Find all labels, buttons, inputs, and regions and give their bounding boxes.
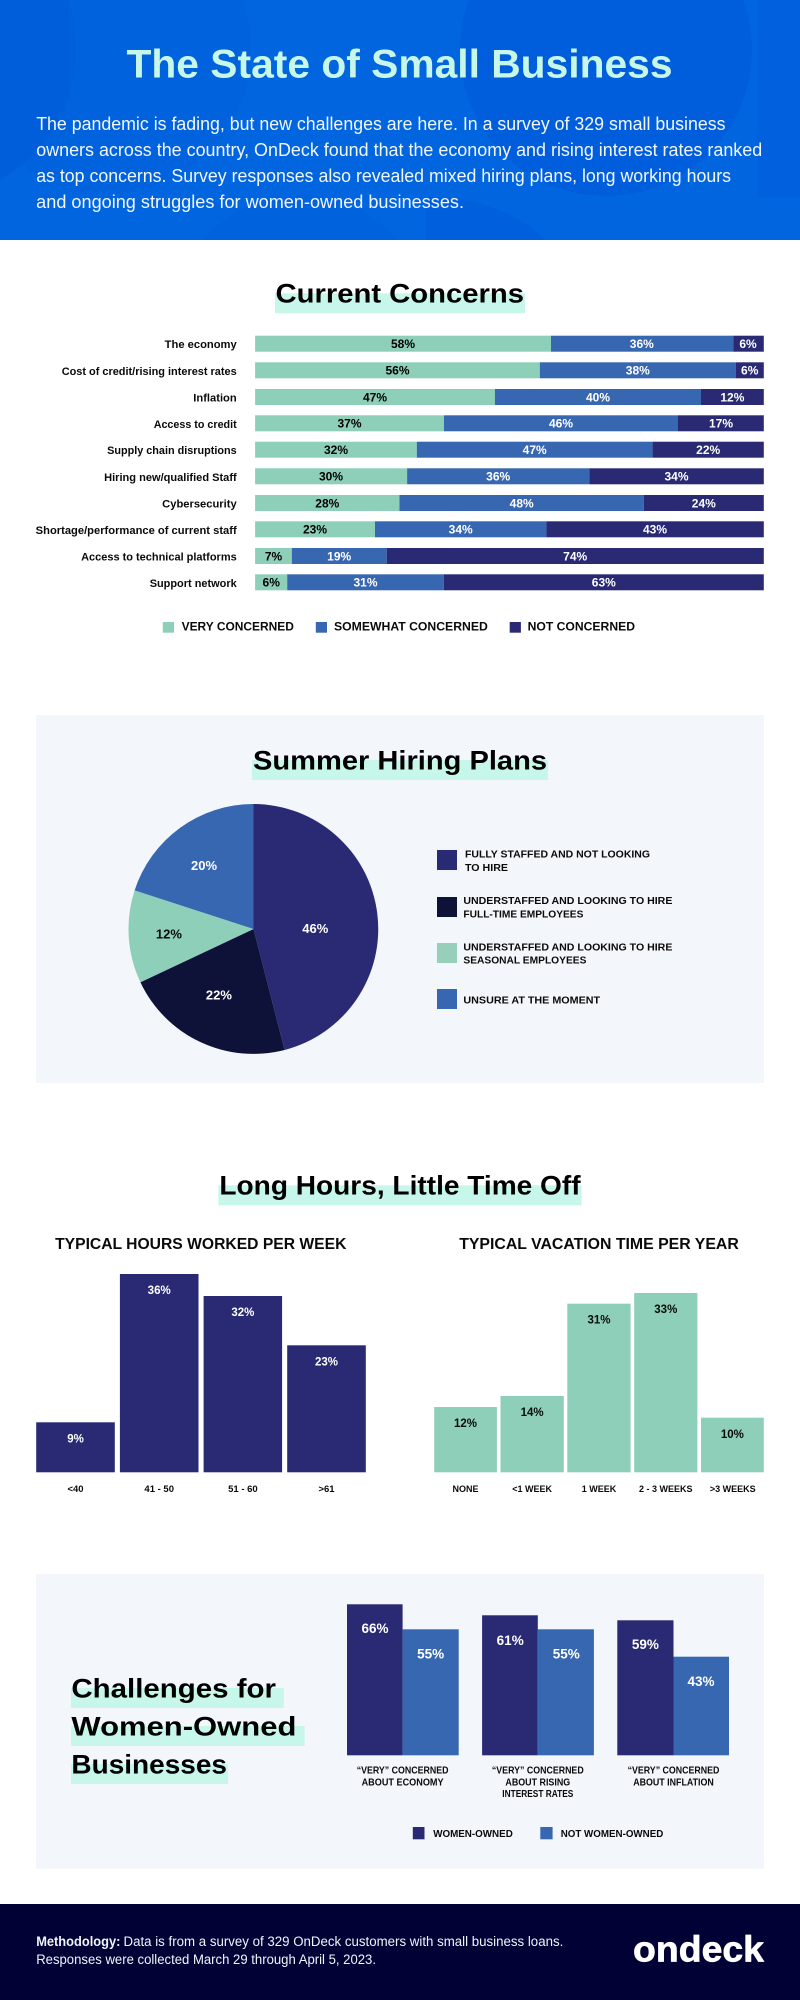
bar values: 32%: [231, 1307, 254, 1319]
pie legend: UNSURE AT THE MOMENT: [463, 994, 601, 1006]
bar captions: INTEREST RATES: [502, 1789, 574, 1800]
somewhat and not concerned values: [327, 337, 759, 590]
grouped bar chart: [347, 1604, 729, 1755]
row labels: Access to credit: [154, 419, 237, 431]
somewhat and not concerned values: 74%: [563, 549, 588, 563]
bars: [36, 1274, 366, 1472]
methodology text: Data is from a survey of 329 OnDeck customers with small business loans.: [124, 1934, 563, 1949]
axis labels: 1 WEEK: [582, 1484, 617, 1494]
somewhat and not concerned values: 46%: [549, 417, 573, 431]
axis labels: <40: [67, 1484, 84, 1495]
bar values: 14%: [521, 1407, 544, 1419]
bar captions: ABOUT RISING: [505, 1777, 570, 1788]
somewhat and not concerned values: 47%: [523, 443, 547, 457]
pie chart: 20%: [191, 858, 217, 873]
somewhat and not concerned values: 12%: [720, 390, 745, 404]
heading: Long Hours, Little Time Off: Long Hours, Little Time Off: [219, 1170, 582, 1200]
somewhat and not concerned values: 6%: [739, 337, 757, 351]
panel: hero header: [0, 0, 800, 240]
row labels: Cybersecurity: [162, 498, 238, 510]
intro text block: as top concerns. Survey responses also revealed mixed hiring plans, long working hours: [36, 166, 731, 186]
panel: summer hiring plans: [36, 715, 764, 1083]
bar captions: ABOUT INFLATION: [633, 1777, 714, 1788]
methodology text: [36, 1934, 563, 1967]
somewhat and not concerned values: 22%: [696, 443, 721, 457]
bar values: [454, 1304, 744, 1441]
heading: Challenges for Women-Owned Businesses: Challenges for: [71, 1674, 277, 1704]
very concerned values: 23%: [303, 523, 327, 537]
intro text block: The pandemic is fading, but new challenges are here. In a survey of 329 small business: [36, 114, 725, 134]
somewhat and not concerned values: 38%: [626, 364, 650, 378]
bar values: 9%: [67, 1434, 84, 1446]
chart title: TYPICAL VACATION TIME PER YEAR: [459, 1236, 739, 1253]
intro text block: and ongoing struggles for women-owned businesses.: [36, 192, 464, 212]
bar values: 33%: [654, 1304, 677, 1316]
grouped bar chart: 55%: [553, 1647, 580, 1662]
very concerned values: [263, 337, 415, 590]
somewhat and not concerned values: 36%: [630, 337, 654, 351]
bar captions: “VERY” CONCERNED: [628, 1766, 719, 1777]
heading: Current Concerns: Current Concerns: [276, 279, 524, 309]
heading: Challenges for Women-Owned Businesses: [71, 1674, 305, 1784]
heading: Summer Hiring Plans: Summer Hiring Plans: [253, 745, 547, 775]
panel: footer: [0, 1904, 800, 2000]
heading: Challenges for Women-Owned Businesses: Businesses: [71, 1750, 227, 1780]
chart: typical hours worked per week: [36, 1236, 366, 1495]
bar captions: “VERY” CONCERNED: [492, 1766, 584, 1777]
grouped bar chart: 43%: [687, 1674, 715, 1689]
somewhat and not concerned values: 19%: [327, 549, 352, 563]
pie legend: [437, 848, 672, 1009]
somewhat and not concerned values: 31%: [353, 576, 378, 590]
chart title: TYPICAL HOURS WORKED PER WEEK: [55, 1236, 347, 1253]
bar values: [67, 1285, 338, 1446]
row labels: [36, 339, 238, 590]
bar values: 31%: [587, 1315, 611, 1327]
very concerned values: 28%: [315, 496, 340, 510]
pie legend: FULL-TIME EMPLOYEES: [463, 908, 583, 920]
bar captions: “VERY” CONCERNED: [357, 1766, 448, 1777]
somewhat and not concerned values: 24%: [692, 496, 716, 510]
chart: typical vacation time per year: [434, 1236, 764, 1494]
somewhat and not concerned values: 40%: [586, 390, 610, 404]
very concerned values: 7%: [265, 549, 283, 563]
bar legend: WOMEN-OWNED: [433, 1829, 513, 1840]
somewhat concerned segments: [287, 336, 736, 590]
very concerned values: 37%: [337, 417, 362, 431]
pie legend: SEASONAL EMPLOYEES: [463, 955, 586, 967]
axis labels: 41 - 50: [144, 1484, 174, 1495]
logo: ondeck: ondeck: [633, 1929, 765, 1970]
methodology text: Responses were collected March 29 through April 5, 2023.: [36, 1952, 376, 1967]
bar values: 23%: [315, 1356, 338, 1368]
methodology text: Methodology:: [36, 1934, 120, 1949]
very concerned values: 6%: [263, 576, 280, 590]
somewhat and not concerned values: 63%: [592, 576, 616, 590]
pie chart: 22%: [206, 988, 232, 1002]
bar captions: [357, 1766, 719, 1800]
bar values: 12%: [454, 1418, 477, 1430]
row labels: The economy: [165, 339, 238, 351]
pie chart: [129, 804, 378, 1054]
grouped bar chart: 61%: [497, 1633, 524, 1648]
intro text block: owners across the country, OnDeck found that the economy and rising interest rates ranked: [36, 140, 762, 160]
very concerned values: 47%: [363, 390, 387, 404]
title: The State of Small Business: [126, 43, 672, 87]
grouped bar chart: 66%: [361, 1621, 389, 1636]
bar legend: NOT WOMEN-OWNED: [561, 1829, 663, 1840]
not concerned segments: [387, 336, 764, 590]
very concerned values: 32%: [324, 443, 348, 457]
intro text block: [36, 114, 762, 212]
legend: current concerns: [163, 620, 635, 634]
somewhat and not concerned values: 34%: [449, 523, 473, 537]
row labels: Inflation: [193, 392, 237, 404]
legend: current concerns: SOMEWHAT CONCERNED: [334, 620, 488, 634]
pie legend: UNDERSTAFFED AND LOOKING TO HIRE: [463, 941, 672, 953]
bar values: 10%: [721, 1429, 744, 1441]
somewhat and not concerned values: 6%: [741, 364, 759, 378]
row labels: Support network: [150, 578, 238, 590]
pie chart: 46%: [302, 921, 329, 936]
heading: Challenges for Women-Owned Businesses: Women-Owned: [71, 1712, 296, 1742]
axis labels: <1 WEEK: [512, 1484, 552, 1494]
bar legend: [413, 1827, 663, 1840]
grouped bar chart: 59%: [632, 1637, 659, 1652]
row labels: Access to technical platforms: [81, 551, 237, 563]
row labels: Supply chain disruptions: [107, 445, 237, 457]
row labels: Shortage/performance of current staff: [36, 525, 237, 537]
axis labels: 2 - 3 WEEKS: [639, 1484, 693, 1494]
grouped bar chart: 55%: [417, 1647, 444, 1662]
very concerned values: 30%: [319, 470, 343, 484]
somewhat and not concerned values: 43%: [643, 523, 667, 537]
axis labels: NONE: [452, 1484, 479, 1494]
very concerned values: 58%: [391, 337, 415, 351]
pie legend: UNDERSTAFFED AND LOOKING TO HIRE: [463, 895, 672, 907]
somewhat and not concerned values: 48%: [510, 496, 534, 510]
somewhat and not concerned values: 36%: [486, 470, 511, 484]
axis labels: >3 WEEKS: [710, 1484, 756, 1494]
pie chart: 12%: [156, 926, 182, 942]
axis labels: [452, 1484, 756, 1494]
somewhat and not concerned values: 34%: [664, 470, 689, 484]
very concerned values: 56%: [385, 364, 410, 378]
axis labels: [67, 1484, 335, 1495]
panel: challenges for women-owned businesses: [36, 1574, 764, 1869]
pie legend: TO HIRE: [465, 862, 508, 874]
bar values: 36%: [148, 1285, 171, 1297]
somewhat and not concerned values: 17%: [709, 417, 733, 431]
row labels: Hiring new/qualified Staff: [104, 472, 237, 484]
legend: current concerns: VERY CONCERNED: [182, 620, 294, 634]
row labels: Cost of credit/rising interest rates: [62, 366, 237, 378]
bars: [434, 1293, 764, 1472]
bar captions: ABOUT ECONOMY: [362, 1777, 444, 1788]
very concerned segments: [255, 336, 551, 590]
axis labels: 51 - 60: [228, 1484, 258, 1495]
legend: current concerns: NOT CONCERNED: [528, 620, 635, 634]
chart: current concerns stacked bars: [36, 336, 764, 590]
pie legend: FULLY STAFFED AND NOT LOOKING: [465, 848, 650, 860]
axis labels: >61: [318, 1484, 335, 1495]
